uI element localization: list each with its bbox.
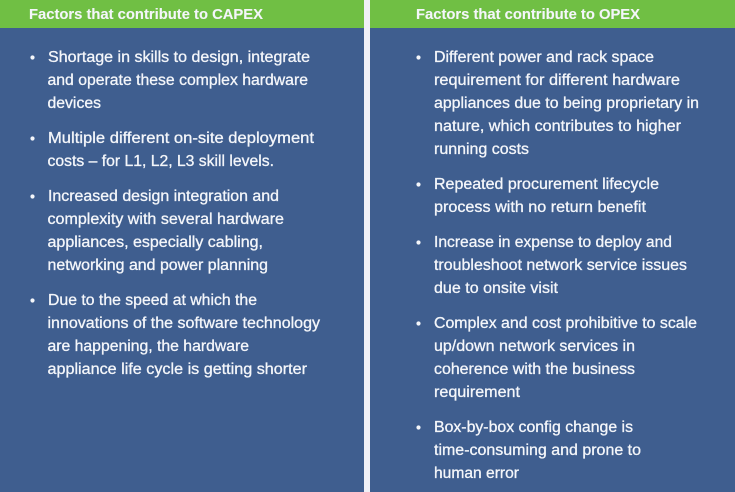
bullet: design integration: appliances, especially cabling,	[48, 234, 263, 251]
bullet: config change: Box-by-box config change is	[434, 419, 633, 436]
bullet: deploy and troubleshoot expense: due to onsite visit	[434, 280, 559, 297]
bullet: skills shortage	[30, 49, 310, 112]
bullet: skills shortage: devices	[48, 95, 101, 112]
bullet: appliance life cycle: innovations of the software technology	[48, 315, 320, 332]
bullet: skills shortage: and operate these complex hardware	[48, 72, 308, 89]
bullet: power and rack space: appliances due to being proprietary in	[434, 95, 699, 112]
bullet: power and rack space: requirement for different hardware	[434, 72, 680, 89]
panel: CAPEX	[0, 0, 364, 492]
bullet: scaling cost: coherence with the business	[434, 361, 635, 378]
bullet: scaling cost: Complex and cost prohibitive to scale	[434, 315, 697, 332]
bullet: config change	[416, 419, 641, 482]
bullet: scaling cost: up/down network services in	[434, 338, 635, 355]
bullet: design integration: complexity with several hardware	[48, 211, 284, 228]
bullet: scaling cost: requirement	[434, 384, 521, 401]
panel: OPEX	[370, 0, 735, 492]
bullet: power and rack space	[416, 49, 699, 158]
bullet: deploy and troubleshoot expense: Increase in expense to deploy and	[434, 234, 672, 251]
bullet: scaling cost	[416, 315, 697, 401]
bullet: design integration: networking and power planning	[48, 257, 268, 274]
bullet: deployment costs	[30, 130, 315, 170]
bullet: design integration	[30, 188, 284, 274]
bullet: config change: time-consuming and prone to	[434, 442, 641, 459]
bullet: deploy and troubleshoot expense: troubleshoot network service issues	[434, 257, 687, 274]
bullet: procurement lifecycle: process with no return benefit	[434, 199, 647, 216]
bullet: skills shortage: Shortage in skills to design, integrate	[48, 49, 310, 66]
bullet: appliance life cycle	[30, 292, 320, 378]
header bar: OPEX	[370, 0, 735, 28]
bullet: deploy and troubleshoot expense	[416, 234, 687, 297]
bullet: deployment costs: Multiple different on-site deployment	[48, 130, 315, 147]
bullet: procurement lifecycle: Repeated procurement lifecycle	[434, 176, 659, 193]
bullet: power and rack space: running costs	[434, 141, 529, 158]
header bar: CAPEX: Factors that contribute to CAPEX	[29, 7, 263, 23]
bullet: appliance life cycle: are happening, the hardware	[48, 338, 249, 355]
panel background: CAPEX	[0, 28, 364, 492]
header bar: OPEX: Factors that contribute to OPEX	[416, 7, 640, 23]
bullet: appliance life cycle: appliance life cycle is getting shorter	[48, 361, 307, 378]
bullet: procurement lifecycle	[416, 176, 659, 216]
bullet: config change: human error	[434, 465, 519, 482]
bullet: deployment costs: costs – for L1, L2, L3 skill levels.	[48, 153, 274, 170]
bullet: design integration: Increased design integration and	[48, 188, 279, 205]
bullet: power and rack space: nature, which contributes to higher	[434, 118, 681, 135]
panel background: OPEX	[370, 28, 735, 492]
bullet: power and rack space: Different power and rack space	[434, 49, 654, 66]
header bar: CAPEX	[0, 0, 364, 28]
bullet: appliance life cycle: Due to the speed at which the	[48, 292, 257, 309]
